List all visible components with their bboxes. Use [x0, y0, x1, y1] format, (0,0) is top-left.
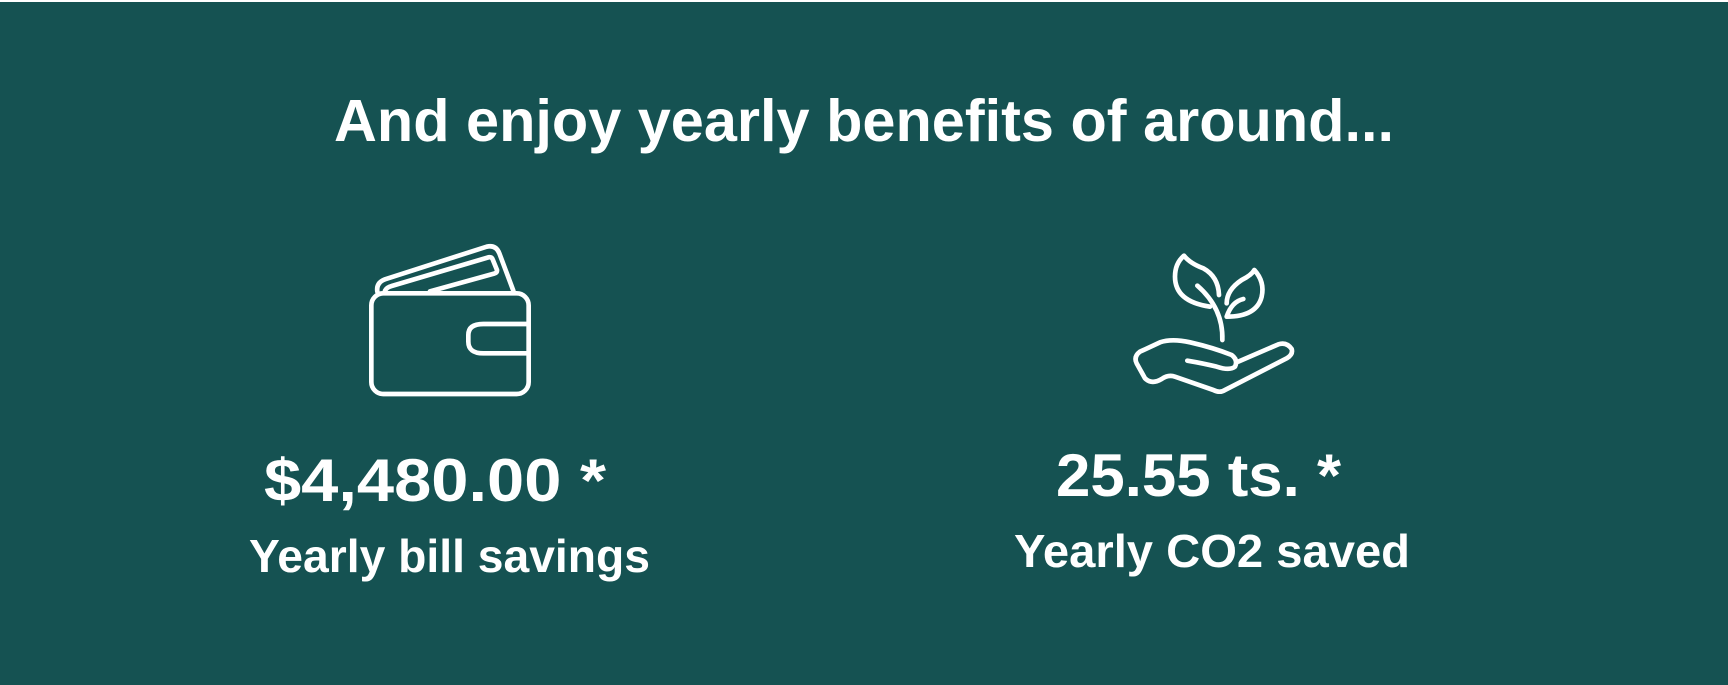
title: And enjoy yearly benefits of around... — [334, 88, 1394, 154]
CO2 amount: 25.55 ts. * — [1056, 442, 1342, 509]
icon: wallet — [371, 246, 529, 394]
savings amount: $4,480.00 * — [264, 447, 607, 514]
icon: hand holding plant — [1136, 256, 1292, 392]
CO2 label: Yearly CO2 saved — [1014, 525, 1410, 577]
savings label: Yearly bill savings — [249, 530, 650, 582]
